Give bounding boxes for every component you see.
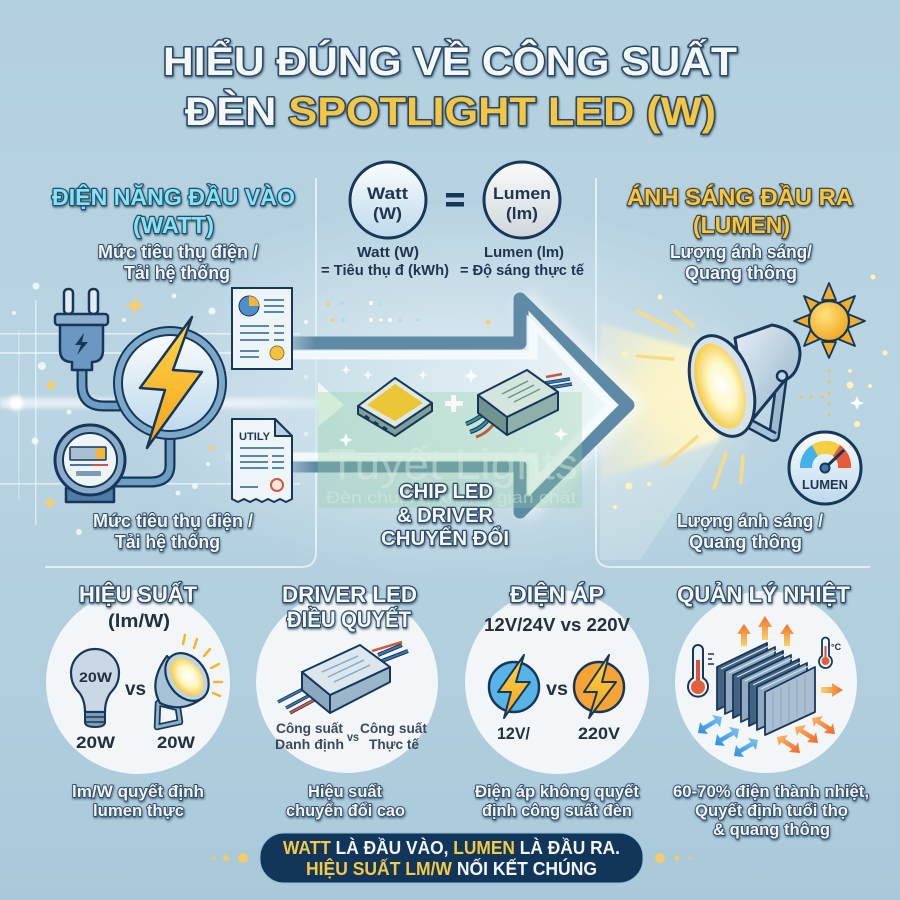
panel: driver LED: chuyển đổi cao [286, 801, 405, 820]
left heading: (WATT) [133, 212, 214, 238]
watermark: Đèn chuẩn - không gian chất [326, 488, 576, 507]
center caption [381, 481, 509, 550]
watt lumen equation: = Độ sáng thực tế [460, 262, 585, 279]
panel: efficiency: HIỆU SUẤT [79, 582, 198, 607]
center caption: CHIP LED [399, 481, 493, 503]
panel: efficiency [46, 582, 230, 820]
panel: thermal management: & quang thông [713, 820, 830, 839]
decorative sparkles right [613, 274, 888, 509]
icon: light bulb [71, 649, 119, 727]
decorative banner dots [212, 853, 692, 863]
icon: orange heat arrows [777, 716, 835, 753]
panel: voltage [465, 582, 649, 820]
watt lumen equation: (W) [373, 204, 402, 223]
icon: heat sink [717, 643, 815, 735]
icon: spotlight lamp [637, 311, 800, 488]
icon: report document [232, 288, 292, 369]
icon: utility bill [232, 419, 292, 502]
center caption: & DRIVER [397, 505, 494, 527]
right heading [627, 183, 853, 283]
panel: driver LED: vs [347, 730, 359, 744]
icon: lumen gauge [789, 432, 861, 504]
panel: voltage: Điện áp không quyết [475, 782, 639, 801]
panel: driver LED: ĐIỀU QUYẾT [287, 607, 412, 632]
watt lumen equation: Lumen (lm) [484, 244, 564, 261]
left heading: Mức tiêu thụ điện / [98, 242, 258, 262]
left heading: Tải hệ thống [124, 263, 230, 283]
icon: plus [445, 395, 463, 412]
panel: thermal management [673, 582, 869, 839]
left bottom caption [93, 511, 253, 552]
icon: thermometers: °C [831, 642, 842, 652]
title: HIỂU ĐÚNG VỀ CÔNG SUẤT [163, 37, 737, 84]
title [163, 37, 737, 134]
panel: thermal management: QUẢN LÝ NHIỆT [677, 582, 851, 607]
left heading [52, 183, 295, 283]
icon: LED driver box [466, 370, 572, 437]
light beam from arrow to lamp [600, 323, 735, 560]
icon: lumen gauge: LUMEN [802, 477, 848, 492]
right heading: Lượng ánh sáng/ [670, 242, 812, 262]
right bottom caption: Lượng ánh sáng / [677, 511, 823, 531]
panel: voltage: ĐIỆN ÁP [510, 582, 604, 607]
panel: driver LED: Hiệu suất [308, 782, 382, 801]
right heading: (LUMEN) [693, 212, 790, 238]
panel: thermal management: 60-70% điện thành nhiệt, [673, 782, 869, 801]
panel: efficiency: (lm/W) [108, 611, 170, 631]
panel: driver LED: Danh định [275, 737, 344, 752]
watt lumen equation: Watt [367, 184, 408, 203]
panel: thermal management: Quyết định tuổi thọ [695, 801, 848, 820]
panel: driver LED [256, 582, 438, 820]
icon: utility bill: UTILY [239, 431, 271, 443]
panel: efficiency: vs [125, 679, 146, 700]
panel: efficiency: 20W [76, 733, 116, 752]
center sparkles [339, 365, 568, 447]
panel: driver LED: Công suất [360, 721, 428, 736]
left bottom caption: Tải hệ thống [115, 532, 220, 552]
icon: power plug, meter and lightning circuit [55, 289, 222, 502]
icon: small spotlight [155, 635, 222, 727]
icon: thermometers [688, 638, 842, 697]
icon: driver box [278, 642, 408, 713]
right bottom caption [677, 511, 823, 552]
icon: 220V bolt [574, 655, 624, 718]
icon: 12V bolt [489, 655, 539, 718]
watt lumen equation: = Tiêu thụ đ (kWh) [321, 262, 449, 279]
watt lumen equation: (lm) [506, 204, 538, 223]
callout: bottom banner [260, 833, 643, 883]
callout: bottom banner: HIỆU SUẤT LM/W NỐI KẾT CHÚNG [306, 858, 597, 879]
icon: blue air arrows [698, 715, 758, 757]
title: ĐÈN SPOTLIGHT LED (W) [185, 89, 716, 134]
right bottom caption: Quang thông [689, 532, 802, 552]
watermark: Tuyết Lights [328, 440, 578, 489]
big arrow [225, 299, 631, 512]
icon: heat arrows up and right [737, 616, 843, 697]
callout: bottom banner: WATT LÀ ĐẦU VÀO, LUMEN LÀ ĐẦU RA. [283, 837, 620, 858]
panel: efficiency: 20W [79, 670, 112, 685]
panel: efficiency: lm/W quyết định [72, 782, 204, 801]
right heading: ÁNH SÁNG ĐẦU RA [627, 183, 853, 210]
panel: voltage: định công suất đèn [482, 801, 632, 820]
panel: voltage: 220V [578, 724, 621, 743]
panel: voltage: 12V/ [497, 724, 530, 743]
panel frame: left and right section borders [45, 178, 870, 567]
watt lumen equation [321, 162, 585, 279]
left heading: ĐIỆN NĂNG ĐẦU VÀO [52, 183, 295, 210]
panel: driver LED: Công suất [276, 721, 344, 736]
right heading: Quang thông [685, 263, 797, 283]
panel: efficiency: lumen thực [93, 801, 184, 820]
panel: driver LED: DRIVER LED [282, 582, 417, 607]
panel: driver LED: Thực tế [369, 737, 419, 752]
watermark [318, 392, 582, 508]
center caption: CHUYỂN ĐỔI [381, 526, 509, 550]
panel: voltage: vs [546, 679, 568, 700]
icon: sun [794, 283, 865, 358]
watt lumen equation: Lumen [493, 184, 551, 203]
panel: efficiency: 20W [157, 733, 196, 752]
left bottom caption: Mức tiêu thụ điện / [93, 511, 253, 531]
panel: voltage: 12V/24V vs 220V [484, 615, 630, 635]
icon: LED chip [358, 378, 432, 436]
watt lumen equation: Watt (W) [357, 244, 419, 261]
